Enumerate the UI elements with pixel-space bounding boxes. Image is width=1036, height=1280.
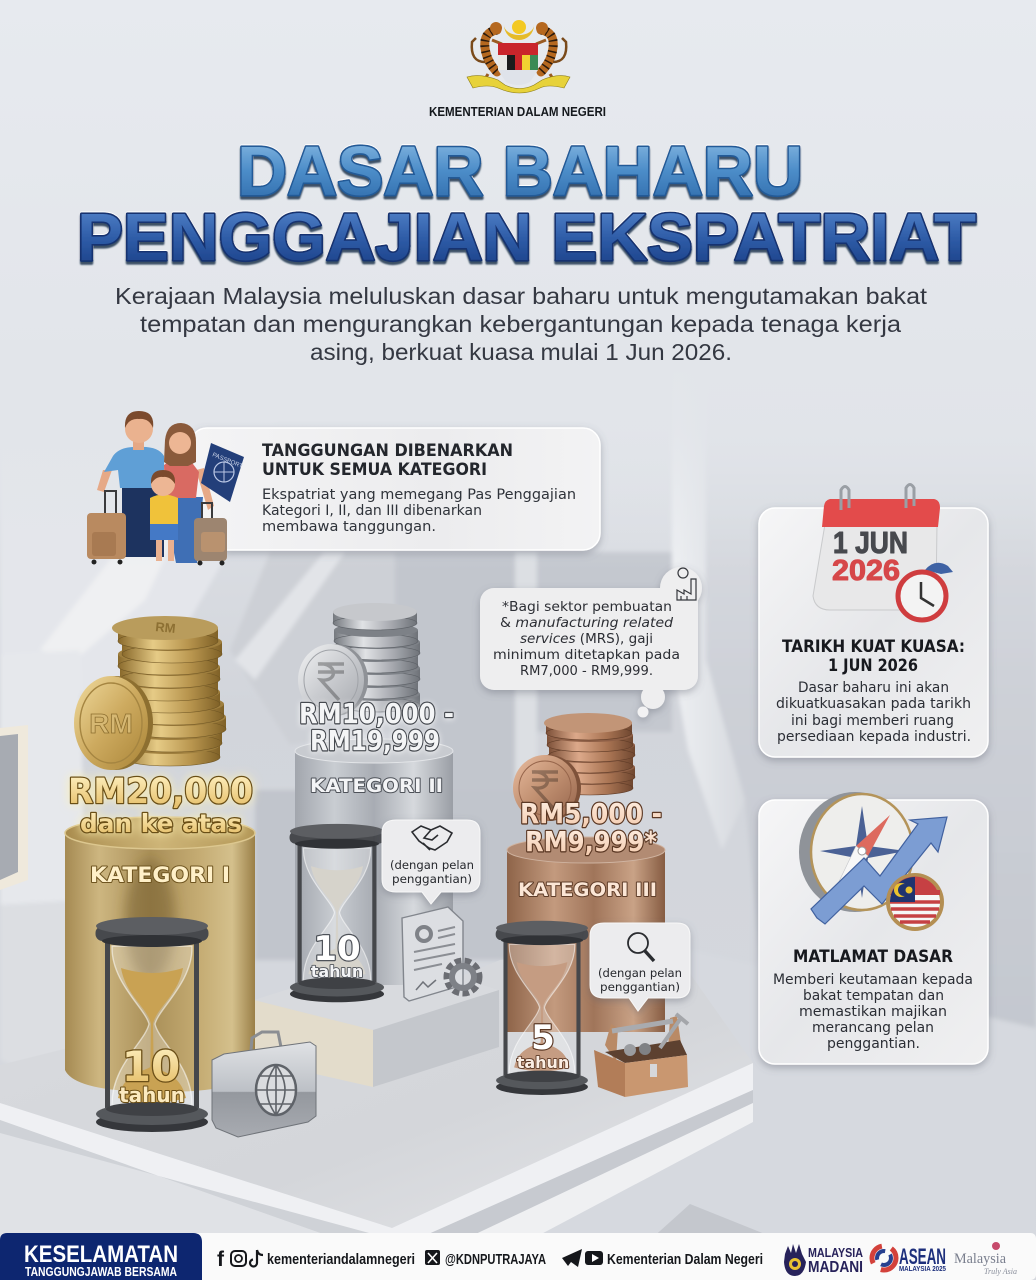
footer slogan block: KESELAMATAN — [24, 1241, 178, 1268]
facebook handle: kementeriandalamnegeri — [267, 1251, 415, 1268]
date heading — [782, 637, 965, 675]
bronze salary label: RM9,999* — [525, 825, 657, 858]
hourglass: 10 years — [96, 917, 208, 1132]
hourglass: 10 years — [290, 824, 384, 1002]
callout: succession plan, magnifier: penggantian) — [600, 980, 680, 994]
category III: bronze — [496, 713, 690, 1097]
goal body: Memberi keutamaan kepada — [773, 972, 973, 988]
panel: policy goal — [759, 792, 988, 1064]
logo: ASEAN Malaysia 2025: MALAYSIA 2025 — [899, 1266, 946, 1273]
icon: telegram youtube — [562, 1249, 603, 1267]
note text: minimum ditetapkan pada — [493, 648, 680, 663]
icon: calendar and clock — [813, 484, 953, 620]
gold salary label: RM20,000 — [68, 772, 253, 812]
icon: calendar and clock: 1 JUN — [833, 525, 908, 560]
title — [77, 132, 976, 275]
note text: & manufacturing related — [500, 616, 674, 631]
category II: silver — [290, 603, 480, 1002]
gold category label: KATEGORI I — [90, 863, 230, 887]
logo: Visit Malaysia: Truly Asia — [984, 1267, 1017, 1276]
icon: succession plan document and gear — [402, 907, 478, 1001]
dependants body — [262, 487, 576, 535]
logo: Malaysia Madani: MADANI — [808, 1259, 863, 1276]
note text: services (MRS), gaji — [520, 632, 653, 647]
footer slogan block: TANGGUNGJAWAB BERSAMA — [25, 1265, 177, 1279]
gold salary label — [68, 772, 253, 838]
gold front coin — [74, 676, 153, 770]
note text — [493, 600, 680, 679]
gold cylinder — [65, 817, 255, 1092]
date body: Dasar baharu ini akan — [798, 680, 949, 696]
note text: *Bagi sektor pembuatan — [502, 600, 672, 615]
hourglass: 10 years: 10 — [313, 929, 361, 969]
silver salary label: RM19,999 — [310, 724, 440, 757]
silver salary label: RM10,000 - — [299, 697, 454, 730]
hourglass: 10 years: tahun — [311, 962, 363, 981]
silver coin stack — [333, 603, 420, 712]
gold front coin: RM — [89, 708, 133, 739]
panel: effective date — [759, 484, 988, 757]
callout: manufacturing sector note — [480, 567, 702, 718]
icon: compass, arrow and Malaysian flag — [799, 792, 947, 931]
crest shield — [498, 43, 538, 85]
hourglass: 10 years: tahun — [119, 1083, 185, 1107]
goal heading: MATLAMAT DASAR — [793, 947, 953, 966]
crest ribbon — [467, 76, 570, 93]
subtitle: Kerajaan Malaysia meluluskan dasar baharu untuk mengutamakan bakat — [115, 283, 928, 309]
date body: ini bagi memberi ruang — [791, 713, 954, 729]
silver front coin — [298, 644, 368, 716]
silver cylinder — [295, 739, 453, 985]
crest tigers — [472, 22, 566, 84]
silver category label: KATEGORI II — [310, 775, 443, 797]
callout: succession plan, handshake: penggantian) — [392, 872, 472, 886]
footer bar — [0, 1233, 1036, 1280]
goal body: bakat tempatan dan — [803, 988, 944, 1004]
logo: ASEAN Malaysia 2025: ASEAN — [899, 1244, 946, 1269]
gold coin stack: RM — [155, 619, 176, 636]
X handle: @KDNPUTRAJAYA — [445, 1251, 546, 1268]
icon: family with luggage: PASSPORT — [211, 452, 244, 470]
hourglass: 5 years — [496, 921, 588, 1095]
goal body — [773, 972, 973, 1052]
goal body: merancang pelan — [812, 1020, 934, 1036]
logo: Malaysia Madani: MALAYSIA — [808, 1246, 863, 1260]
hourglass: 5 years: 5 — [531, 1018, 555, 1058]
subtitle: tempatan dan mengurangkan kebergantungan kepada tenaga kerja — [140, 311, 901, 337]
icon: facebook instagram tiktok — [217, 1248, 263, 1271]
logo: Malaysia Madani — [784, 1244, 863, 1276]
note text: RM7,000 - RM9,999. — [520, 664, 653, 679]
gold salary label: dan ke atas — [80, 809, 242, 838]
callout: succession plan, handshake: (dengan pelan — [390, 858, 474, 872]
date heading: TARIKH KUAT KUASA: — [782, 637, 965, 656]
category I: gold — [65, 616, 316, 1137]
gold coin stack — [112, 616, 226, 766]
raised silver platform — [254, 957, 499, 1087]
dependants body: membawa tanggungan. — [262, 519, 436, 535]
icon: calendar and clock: 2026 — [832, 555, 900, 587]
date body: dikuatkuasakan pada tarikh — [776, 696, 971, 712]
bronze category label: KATEGORI III — [518, 879, 657, 901]
bronze coin stack — [544, 713, 635, 795]
icon: X — [425, 1250, 440, 1265]
bronze salary label — [520, 797, 662, 858]
hourglass: 10 years: 10 — [122, 1042, 180, 1091]
date heading: 1 JUN 2026 — [828, 656, 918, 675]
ministry name: KEMENTERIAN DALAM NEGERI — [429, 105, 606, 119]
title: DASAR BAHARU — [237, 132, 803, 210]
subtitle — [115, 283, 928, 365]
dependants heading: TANGGUNGAN DIBENARKAN — [262, 441, 513, 461]
icon: family with luggage — [87, 411, 244, 566]
logo: Visit Malaysia: Malaysia — [954, 1251, 1006, 1267]
icon: magnifying glass — [628, 933, 654, 961]
hourglass: 5 years: tahun — [517, 1053, 569, 1072]
bronze cylinder — [507, 837, 665, 1032]
callout: succession plan, magnifier — [590, 923, 690, 1011]
footer slogan block — [0, 1233, 202, 1280]
panel: dependants — [87, 411, 600, 566]
subtitle: asing, berkuat kuasa mulai 1 Jun 2026. — [310, 339, 732, 365]
dependants body: Kategori I, II, dan III dibenarkan — [262, 503, 482, 519]
icon: handshake — [412, 826, 452, 850]
logo: ASEAN Malaysia 2025 — [872, 1244, 946, 1273]
goal body: memastikan majikan — [799, 1004, 947, 1020]
dependants heading: UNTUK SEMUA KATEGORI — [262, 460, 487, 480]
icon: briefcase with globe — [212, 1032, 316, 1137]
date body — [776, 680, 971, 745]
bronze front coin — [513, 755, 581, 821]
callout: succession plan, handshake — [382, 820, 480, 904]
callout: succession plan, magnifier: (dengan pelan — [598, 966, 682, 980]
crest sun and crescent — [504, 20, 534, 40]
date body: persediaan kepada industri. — [777, 729, 971, 745]
silver salary label — [299, 697, 454, 757]
icon: toolbox — [594, 1014, 688, 1097]
lower stage platform — [0, 945, 780, 1240]
icon: facebook instagram tiktok: f — [217, 1248, 225, 1271]
bronze salary label: RM5,000 - — [520, 797, 662, 830]
ministry crest — [467, 20, 570, 93]
logo: Visit Malaysia — [954, 1242, 1017, 1276]
icon: factory and gear — [677, 568, 696, 600]
dependants body: Ekspatriat yang memegang Pas Penggajian — [262, 487, 576, 503]
dependants heading — [262, 441, 513, 480]
youtube channel: Kementerian Dalam Negeri — [607, 1251, 763, 1268]
title: PENGGAJIAN EKSPATRIAT — [77, 200, 976, 275]
goal body: penggantian. — [827, 1036, 920, 1052]
